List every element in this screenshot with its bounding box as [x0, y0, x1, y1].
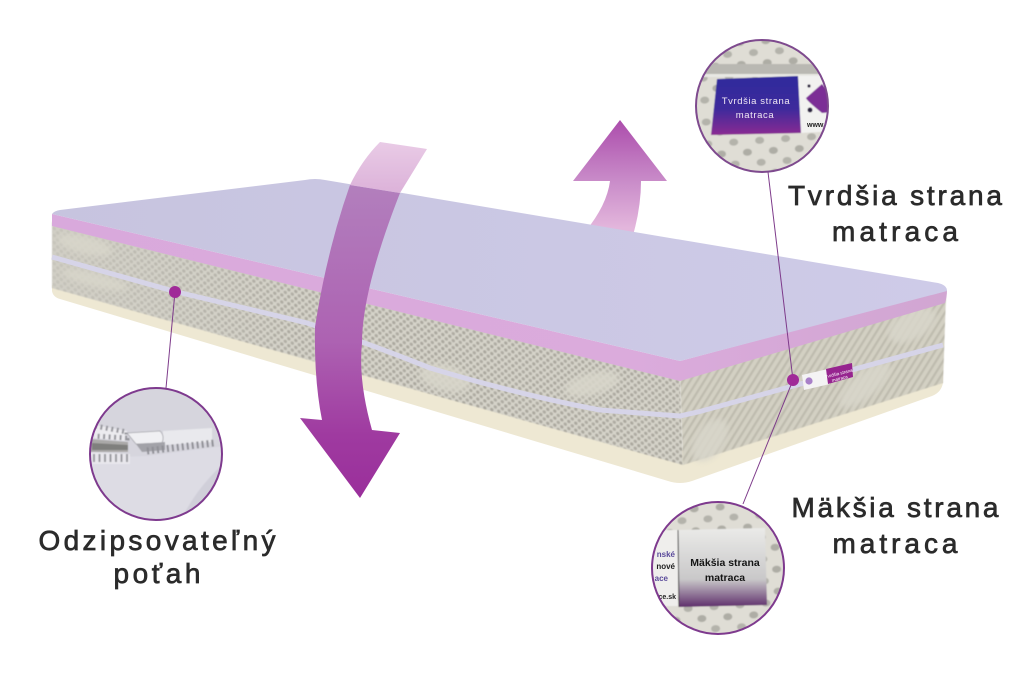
circle: softer side label photo: ce.sk	[658, 594, 676, 601]
heading: firmer side: Tvrdšia strana	[788, 180, 1002, 211]
callout: maksia strana line	[743, 380, 793, 504]
mattress purple band	[52, 214, 947, 381]
small mattress label: Tvrdšia strana	[824, 368, 854, 379]
heading: firmer side, second line: matraca	[832, 216, 958, 247]
circle: softer side label photo: ace	[655, 574, 669, 583]
heading: softer side, second line: matraca	[832, 528, 958, 559]
small mattress label: matraca	[831, 374, 849, 383]
mesh motifs	[56, 229, 942, 468]
callout dot: zipper	[169, 286, 181, 298]
heading: removable cover: Odzipsovateľný	[38, 525, 276, 556]
circle: firmer side label photo: www.	[806, 122, 825, 129]
circle: firmer side label photo: Tvrdšia strana	[722, 96, 790, 107]
small mattress label	[802, 363, 854, 390]
circle: zipper photo	[88, 386, 224, 522]
callout dot: side label	[787, 374, 799, 386]
mattress right mesh side	[680, 296, 946, 465]
up arrow	[573, 120, 667, 245]
down arrow	[300, 142, 427, 498]
heading: removable cover, second line: poťah	[114, 558, 200, 589]
circle: firmer side label photo	[695, 39, 829, 173]
callout: tvrdsia strana line	[768, 172, 793, 380]
circle: softer side label photo: Mäkšia strana	[690, 557, 760, 569]
heading: softer side: Mäkšia strana	[792, 492, 999, 523]
mattress left mesh side	[52, 222, 683, 465]
circle: firmer side label photo: matraca	[736, 110, 774, 121]
circle: softer side label photo: matraca	[705, 572, 745, 584]
mattress cream base	[52, 285, 943, 483]
mattress top surface	[52, 179, 947, 361]
circle: softer side label photo: nské	[657, 550, 676, 559]
circle: softer side label photo	[650, 500, 790, 640]
zipper	[52, 257, 943, 416]
circle: softer side label photo: nové	[656, 562, 676, 571]
mattress	[52, 179, 947, 483]
callout: zipper line	[166, 292, 175, 388]
